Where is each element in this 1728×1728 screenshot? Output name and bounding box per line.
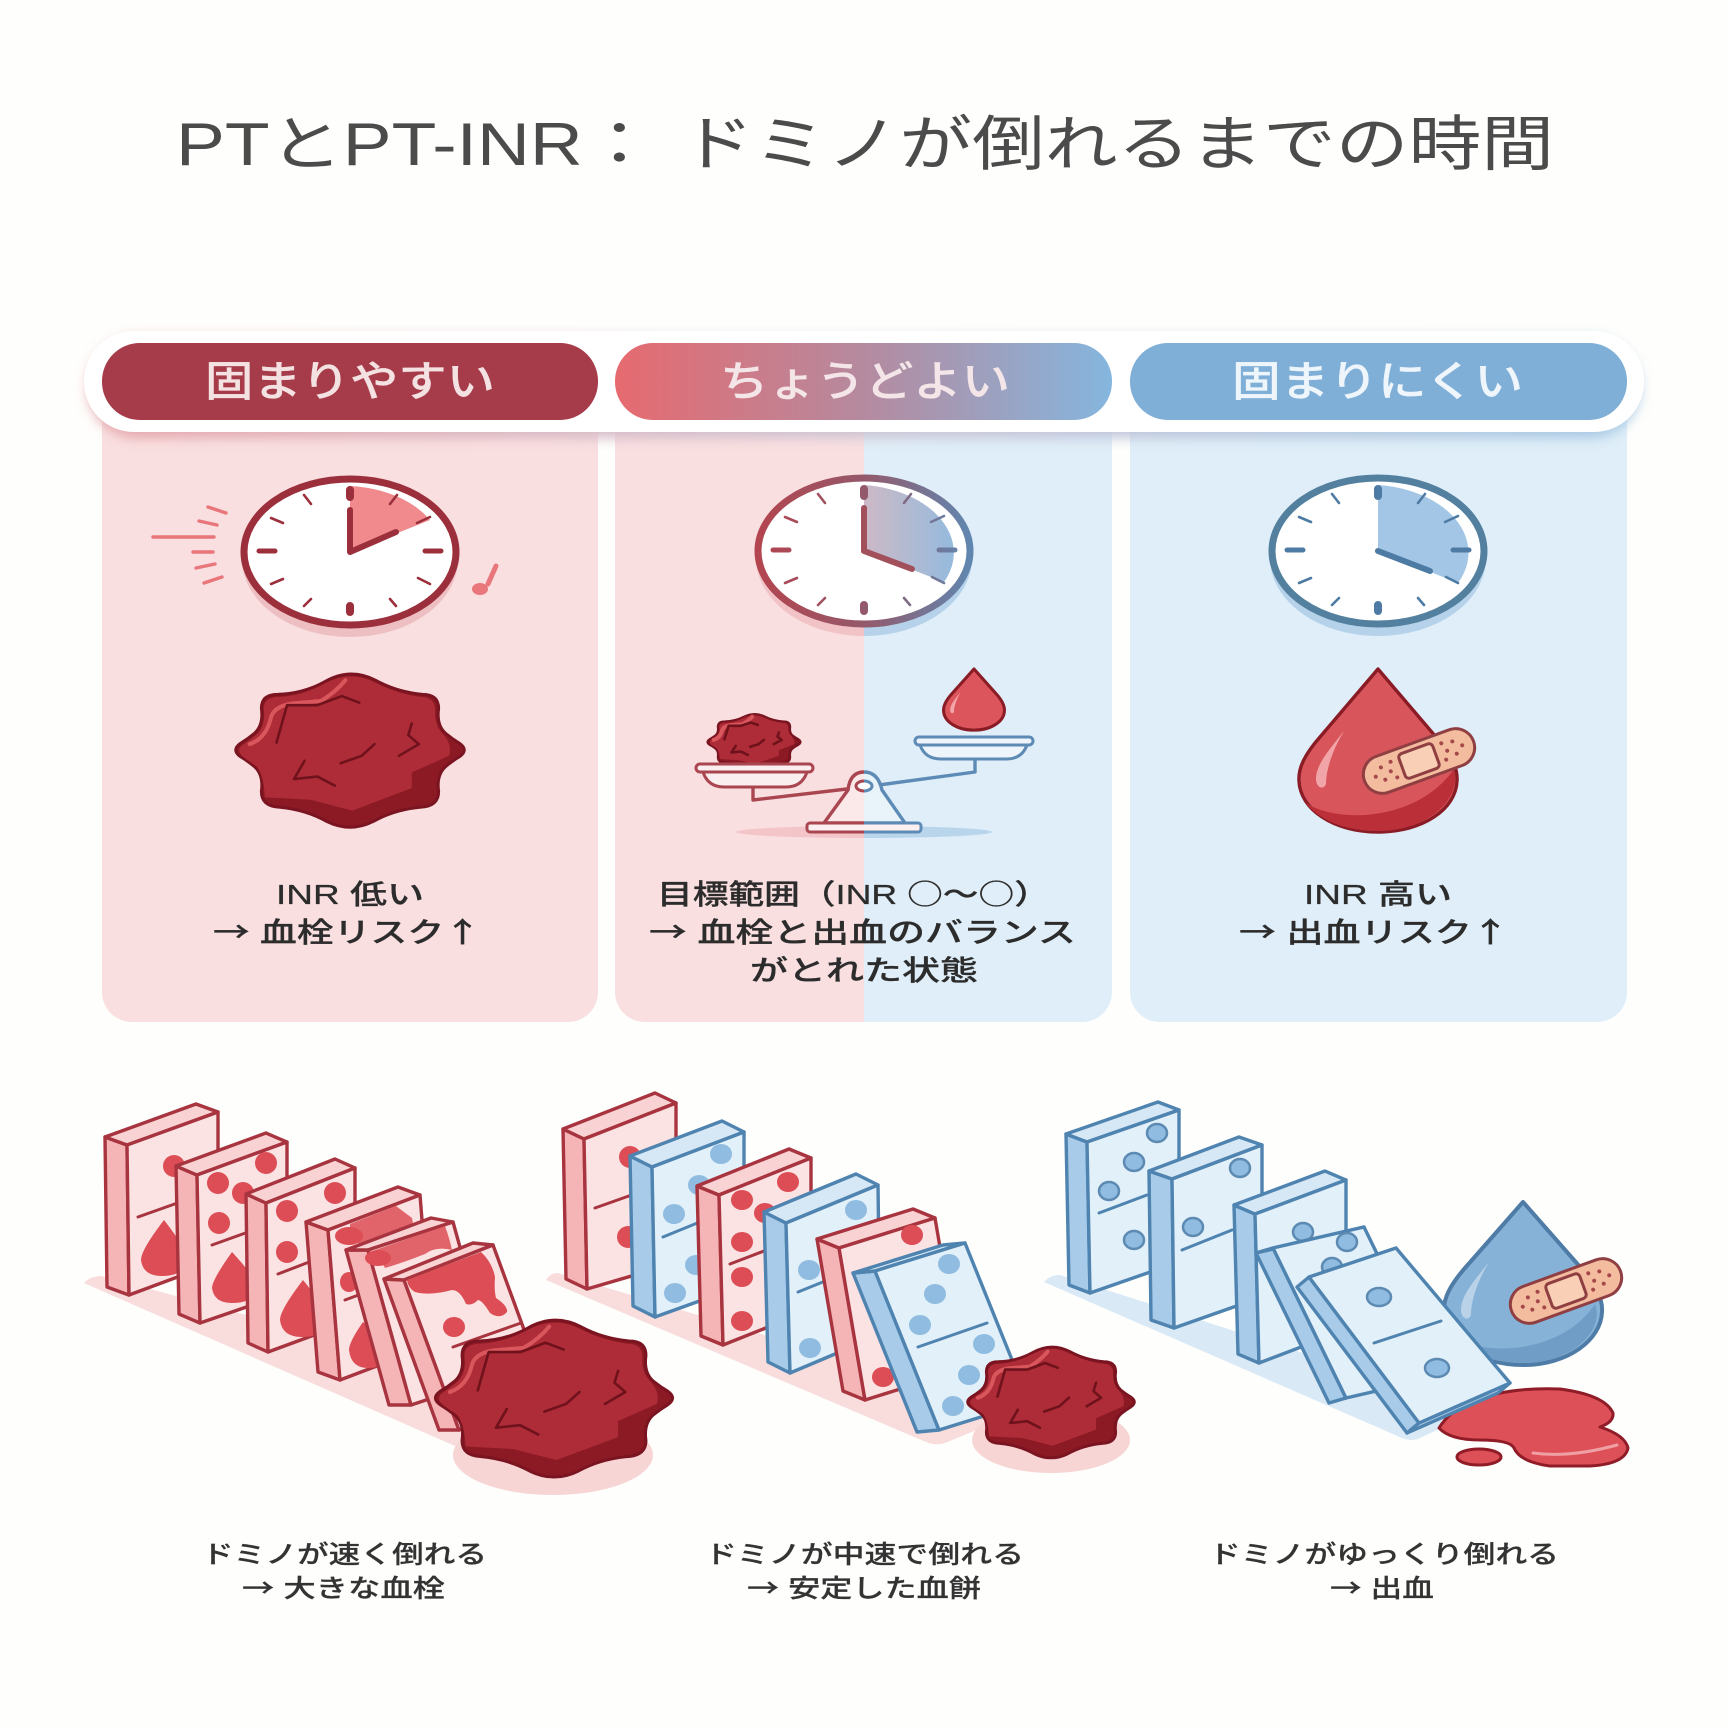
clock: fast	[242, 479, 458, 637]
icon: medium clot	[968, 1347, 1134, 1458]
clock: balanced	[756, 478, 972, 636]
panel: clots poorly	[1130, 400, 1627, 1022]
icon: speed lines	[153, 507, 496, 595]
icon: blood puddle	[1439, 1389, 1628, 1466]
panel: clots easily	[102, 400, 598, 1022]
caption: fast	[202, 1541, 487, 1605]
caption: slow: ドミノがゆっくり倒れる	[1209, 1541, 1559, 1569]
text: target range: がとれた状態	[750, 955, 978, 986]
text: target range: → 血栓と出血のバランス	[649, 911, 1076, 951]
domino row: fast	[84, 1104, 673, 1495]
pill: just right	[615, 343, 1112, 420]
caption: slow: → 出血	[1330, 1569, 1434, 1605]
caption: fast: → 大きな血栓	[242, 1569, 445, 1605]
icon: large clot	[435, 1320, 673, 1477]
icon: small clot	[708, 715, 800, 770]
text: target range	[649, 873, 1076, 986]
domino row: slow	[1044, 1102, 1628, 1466]
clock: slow	[1270, 478, 1486, 636]
text: INR low: → 血栓リスク ↑	[213, 911, 481, 951]
caption: medium: → 安定した血餅	[747, 1569, 981, 1605]
pill: clots poorly: 固まりにくい	[1232, 358, 1523, 405]
icon: clot	[236, 674, 464, 827]
icon: blood drop with bandage	[1299, 669, 1480, 832]
pill: clots easily	[102, 343, 598, 420]
title: PTとPT-INR：	[176, 111, 656, 178]
text: INR high	[1239, 879, 1509, 951]
caption: fast: ドミノが速く倒れる	[202, 1541, 487, 1569]
pill: clots easily: 固まりやすい	[205, 358, 495, 405]
pill: just right: ちょうどよい	[720, 358, 1010, 405]
text: INR high: → 出血リスク ↑	[1239, 911, 1509, 951]
title: ドミノが倒れるまでの時間	[681, 111, 1554, 178]
caption: medium	[705, 1541, 1024, 1605]
caption: medium: ドミノが中速で倒れる	[705, 1541, 1024, 1569]
domino row: medium	[546, 1093, 1134, 1473]
header band	[84, 331, 1644, 438]
icon: small drop	[944, 669, 1004, 730]
panel: just right	[615, 400, 1112, 1022]
text: INR low: INR 低い	[276, 879, 424, 910]
pill: clots poorly	[1130, 343, 1627, 420]
text: target range: 目標範囲 （ INR ○～○）	[657, 873, 1050, 913]
icon: blue drop with bandage	[1444, 1202, 1627, 1365]
text: INR high: INR 高い	[1304, 879, 1452, 910]
icon: balance scale	[696, 669, 1033, 838]
text: INR low	[213, 879, 481, 951]
caption: slow	[1209, 1541, 1559, 1605]
